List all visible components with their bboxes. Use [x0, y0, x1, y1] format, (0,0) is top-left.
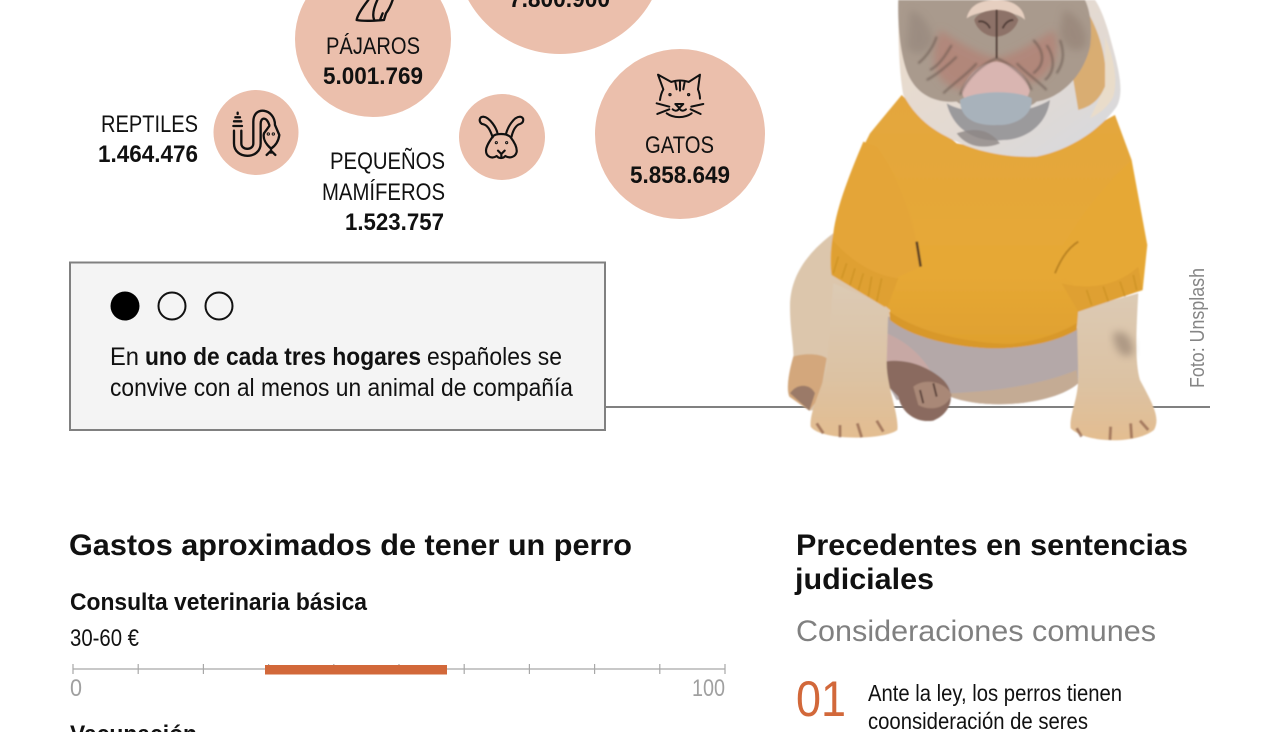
circle: gatos: GATOS: [645, 132, 714, 159]
circle: perros: [455, 0, 665, 54]
heading: precedentes: judiciales: [794, 563, 934, 596]
icon: snake: [233, 111, 279, 156]
range bar chart: 0: [70, 675, 82, 702]
circle: pájaros: PÁJAROS: [326, 33, 420, 60]
list item 01: 01: [796, 671, 846, 727]
cost item: consulta veterinaria: Consulta veterinaria básica: [70, 589, 367, 616]
cost item: consulta veterinaria: [70, 589, 725, 702]
subheading: consideraciones comunes: Consideraciones comunes: [796, 615, 1156, 648]
label: reptiles: [98, 111, 198, 168]
cost item: consulta veterinaria: 30-60 €: [70, 625, 140, 652]
icon: bird: [357, 0, 393, 21]
circle: pájaros: [295, 0, 451, 117]
callout: uno de cada tres hogares: españoles se: [427, 343, 562, 371]
range bar chart: [70, 664, 725, 702]
photo credit: Foto: Unsplash: [1187, 268, 1209, 388]
dog haunch: [788, 233, 890, 411]
hood: [898, 0, 1120, 157]
sweater left sleeve: [831, 142, 918, 307]
face: [898, 0, 1091, 111]
heading: gastos: Gastos aproximados de tener un perro: [69, 529, 632, 562]
dog right foreleg: [1071, 293, 1156, 440]
label: pequeños mamíferos: PEQUEÑOS: [330, 148, 445, 175]
sweater body: [863, 95, 1132, 348]
heading: precedentes: Precedentes en sentencias: [796, 529, 1188, 562]
dog left foreleg: [811, 283, 898, 438]
heading: precedentes: [794, 529, 1188, 596]
floor line: [605, 406, 1210, 408]
neck shadow and fur: [947, 100, 1050, 140]
toes: [817, 421, 1148, 440]
icon: cat: [657, 75, 703, 117]
dog belly: [883, 317, 1078, 404]
circle: gatos: [595, 49, 765, 219]
callout: uno de cada tres hogares: En: [110, 343, 139, 371]
nose: [974, 10, 1018, 37]
circle: pájaros: 5.001.769: [323, 63, 423, 90]
circle: gatos: 5.858.649: [630, 162, 730, 189]
label: reptiles: REPTILES: [101, 111, 198, 138]
jowls: [934, 30, 1057, 90]
label: pequeños mamíferos: 1.523.757: [345, 209, 444, 236]
chin: [962, 62, 1030, 109]
label: pequeños mamíferos: [322, 148, 445, 236]
label: reptiles: 1.464.476: [98, 141, 198, 168]
circle: reptiles: [214, 90, 298, 175]
callout: uno de cada tres hogares: uno de cada tres hogares: [145, 343, 421, 371]
label: pequeños mamíferos: MAMÍFEROS: [322, 179, 445, 206]
icon: rabbit: [480, 117, 523, 158]
callout: uno de cada tres hogares: convive con al menos un animal de compañía: [110, 374, 573, 402]
sweater right sleeve: [1055, 160, 1147, 312]
list item 01: [796, 671, 1122, 732]
mouth and wrinkles: [918, 37, 1063, 95]
dog back paw: [885, 361, 951, 421]
nose bridge: [967, 0, 1025, 20]
photo: dog in yellow sweater: [788, 0, 1156, 440]
callout: uno de cada tres hogares: [70, 262, 605, 430]
list item 01: Ante la ley, los perros tienen: [868, 680, 1122, 706]
icon: three dots: [110, 292, 232, 320]
circle: pequeños mamíferos: [459, 94, 545, 180]
range bar chart: 100: [692, 675, 725, 702]
